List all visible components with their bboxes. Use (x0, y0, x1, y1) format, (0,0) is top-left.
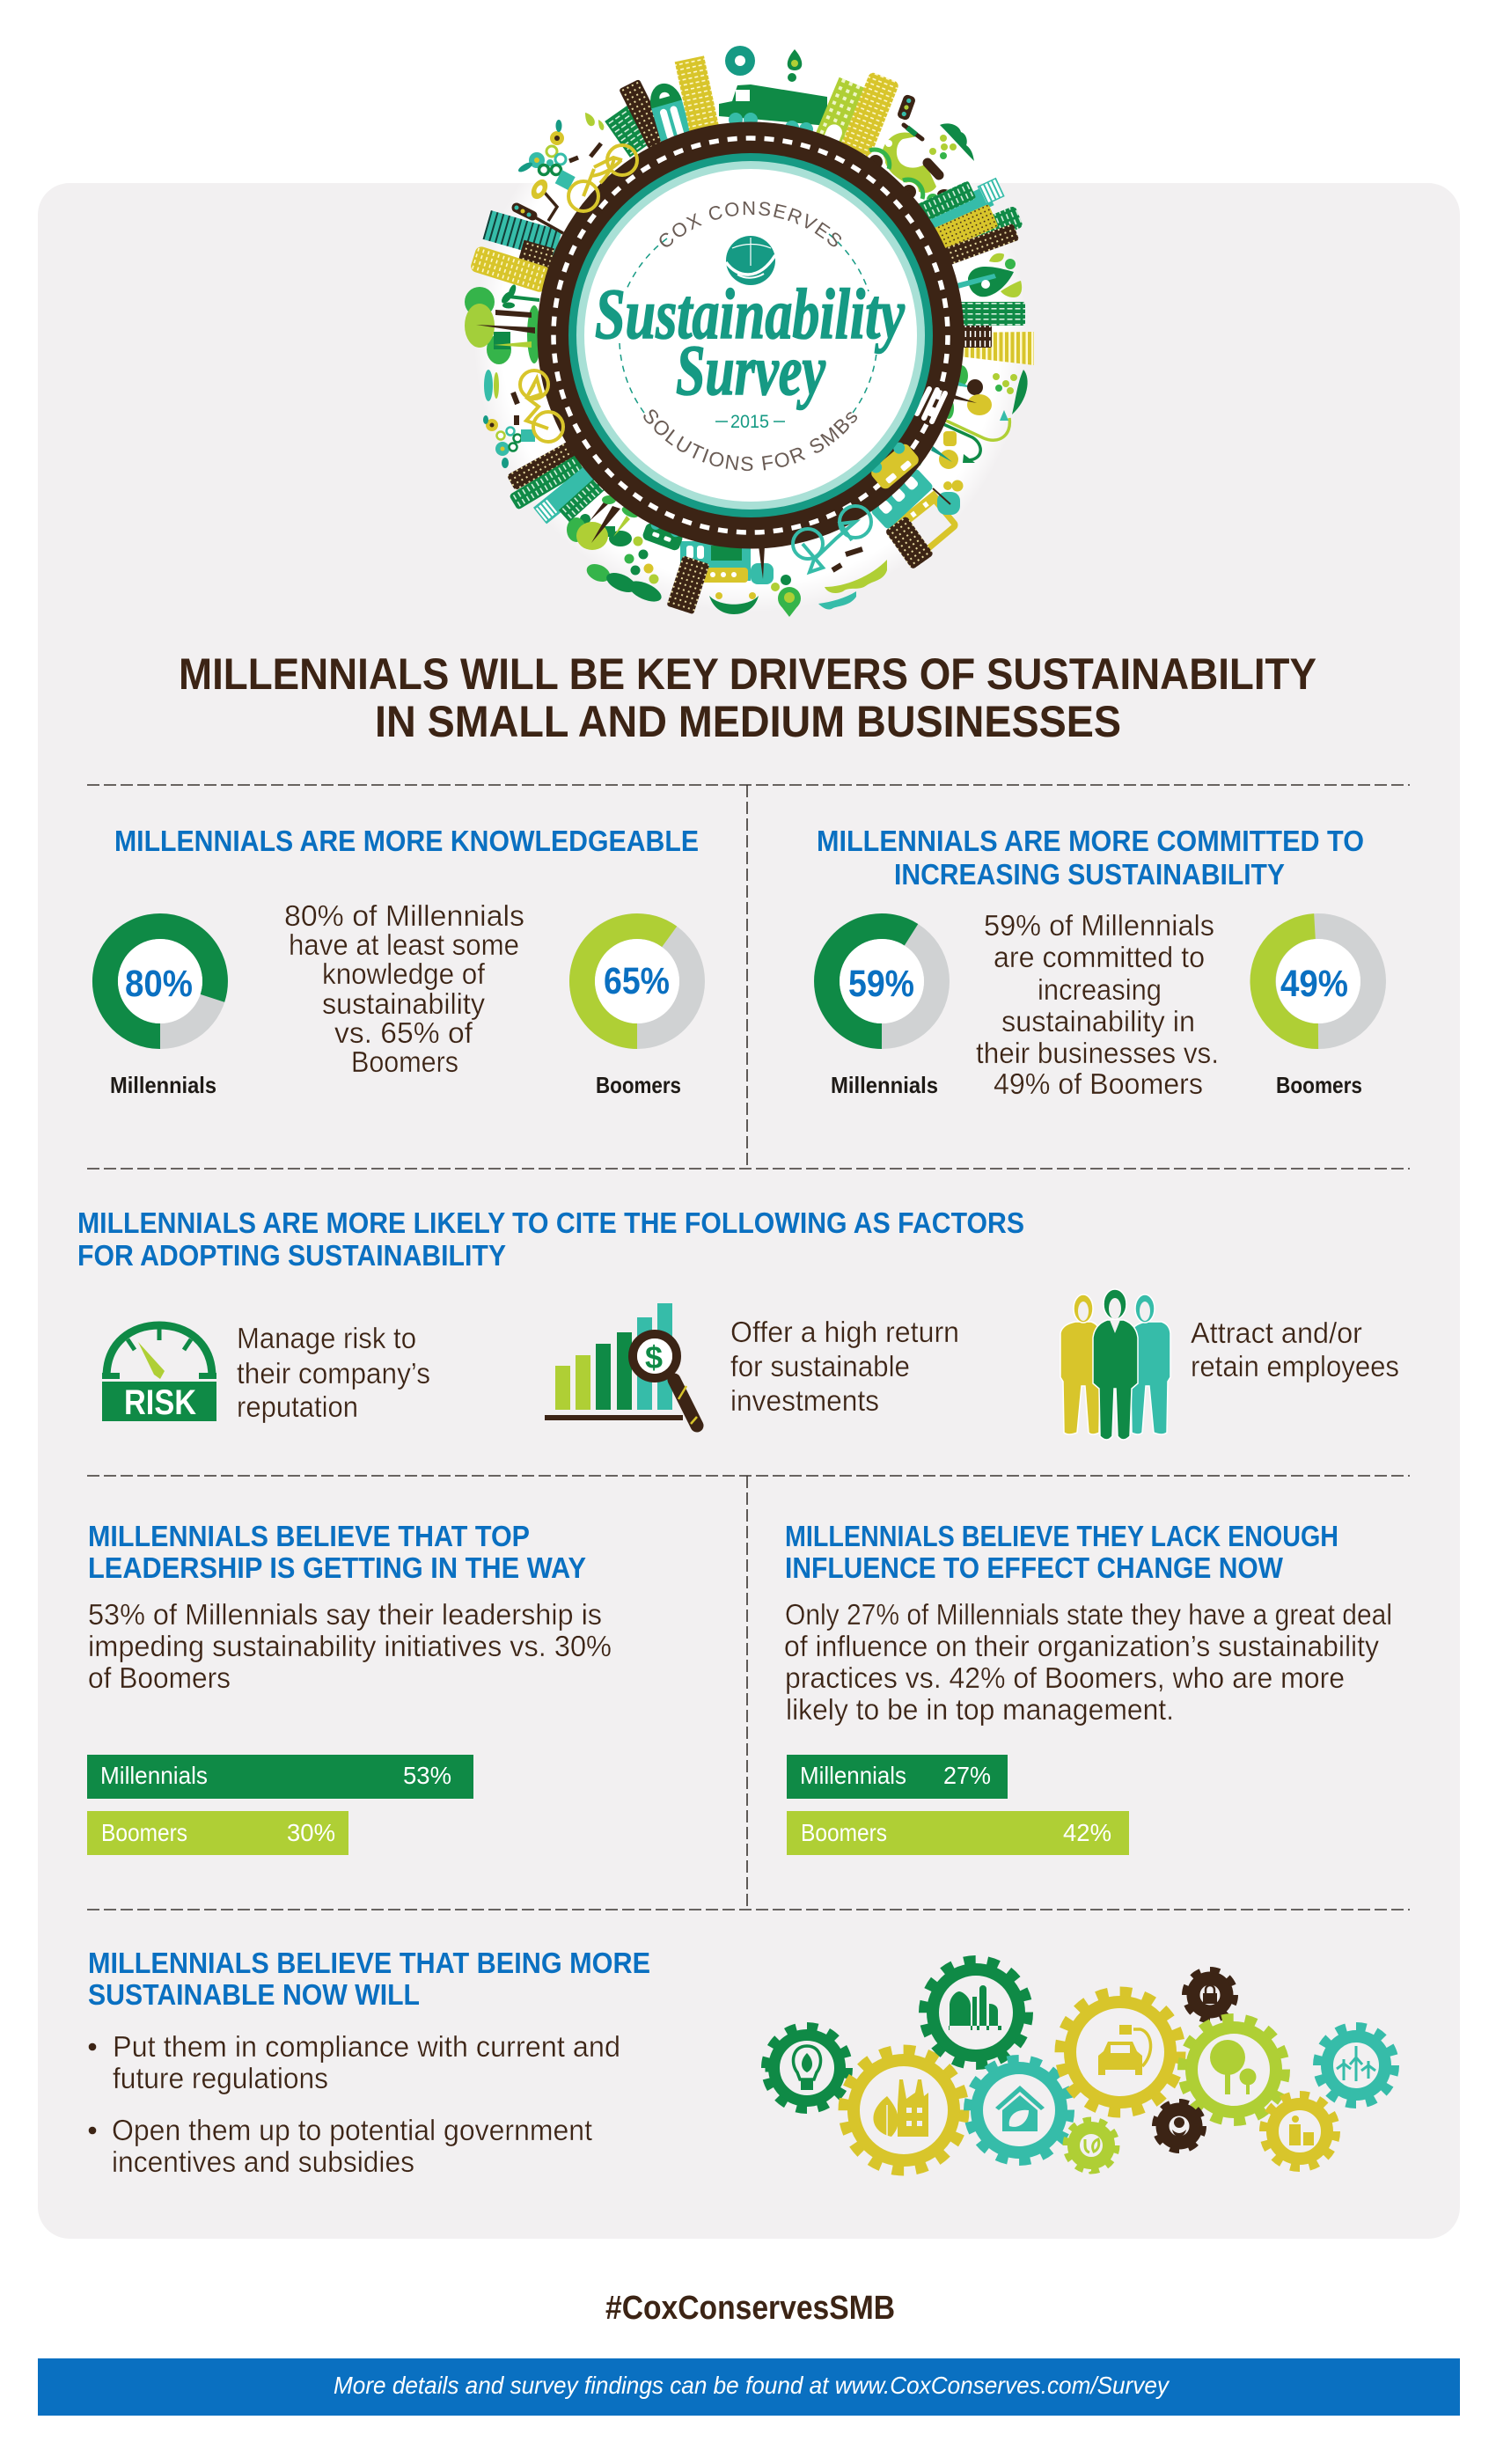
text: manage risk: their company’s (237, 1357, 430, 1390)
gear: electric car (1060, 1991, 1181, 2113)
gear: light bulb (766, 2026, 848, 2110)
text: 2015: 2015 (730, 412, 769, 432)
donut: millennials 80 percent: 80% (125, 963, 193, 1005)
text: solutions for smbs: SOLUTIONS FOR SMBs (643, 409, 857, 472)
footer bar: More details and survey findings can be found at www.CoxConserves.com/Survey (334, 2372, 1170, 2399)
text: manage risk: reputation (237, 1390, 358, 1423)
bullet list: Put them in compliance with current and (113, 2030, 620, 2063)
heading: sustainable now (88, 1947, 650, 2011)
text: influence description (784, 1598, 1392, 1726)
icon: bar chart with magnifier: $ (645, 1339, 663, 1375)
text: survey: Survey (676, 330, 825, 410)
icon: three employees (1060, 1289, 1170, 1440)
icon: green car bottom (642, 517, 686, 552)
heading: adoption factors: FOR ADOPTING SUSTAINABILITY (77, 1239, 506, 1272)
badge centre (584, 169, 917, 502)
gear: recycling person (1264, 2094, 1336, 2168)
icon: teal bicycle bottom (793, 506, 871, 572)
icon: risk gauge (102, 1325, 216, 1422)
gear: wind turbines (1317, 2027, 1395, 2104)
icon: sprout (500, 283, 539, 308)
donut: boomers 49 percent (1263, 926, 1373, 1098)
bullet list (88, 2030, 620, 2178)
icon: teal tree and shrubs (933, 480, 963, 515)
donut: millennials 59 percent: 59% (848, 963, 914, 1005)
gear: brown lock (1184, 1969, 1236, 2020)
icon: risk gauge: RISK (124, 1383, 196, 1422)
gear: trees (1182, 2018, 1286, 2122)
panel: committed (817, 825, 1373, 1100)
icon: cox leaf and hand (726, 236, 775, 285)
panel: being more sustainable (88, 1947, 1395, 2178)
icon: bottom car and pin (709, 575, 801, 617)
icon: leaf and stem (953, 253, 1022, 297)
icon: trees lower right (920, 431, 958, 469)
dashed circle (620, 234, 877, 416)
hashtag: #CoxConservesSMB (605, 2290, 895, 2327)
zebra crossing (917, 389, 945, 422)
road centre dashes (554, 138, 948, 532)
donut: boomers 65 percent: 65% (604, 960, 670, 1002)
icon: yellow bicycle upper left (568, 143, 637, 211)
bullet list: future regulations (113, 2062, 328, 2094)
icon: bar chart with magnifier (545, 1303, 697, 1426)
title (179, 649, 1316, 746)
donut: millennials 59 percent: Millennials (831, 1072, 938, 1098)
icon: flowers upper left (517, 120, 576, 190)
bar chart: leadership: 53% (403, 1762, 451, 1789)
donut: millennials 80 percent: Millennials (110, 1072, 216, 1098)
text: commitment description: their businesses vs. (976, 1037, 1219, 1069)
main panel (38, 183, 1460, 2239)
logo: sustainability survey badge (465, 46, 1034, 617)
bar chart: influence: Boomers (801, 1819, 887, 1846)
donut: millennials 59 percent (827, 926, 938, 1098)
icon: city ring left (465, 113, 605, 524)
heading: influence: MILLENNIALS BELIEVE THEY LACK ENOUGH (785, 1520, 1338, 1552)
icon: tree bottom left (567, 495, 640, 550)
text: knowledge description: have at least some (289, 928, 519, 961)
title: MILLENNIALS WILL BE KEY DRIVERS OF SUSTAINABILITY (179, 649, 1316, 699)
icon: city ring top (605, 55, 974, 202)
gear: eco house (968, 2059, 1070, 2161)
text: leadership description (88, 1598, 612, 1694)
text: high return: investments (730, 1384, 879, 1417)
icon: cloud top right (929, 123, 974, 161)
bullet list: Open them up to potential government (112, 2114, 592, 2146)
bullet list: incentives and subsidies (112, 2145, 414, 2178)
text: commitment description: 49% of Boomers (994, 1067, 1203, 1100)
text: influence description: likely to be in top management. (786, 1693, 1174, 1726)
text: knowledge description: Boomers (351, 1045, 458, 1078)
text: knowledge description: 80% of Millennials (284, 899, 524, 932)
text: manage risk (237, 1322, 430, 1423)
donut: boomers 65 percent (583, 926, 692, 1098)
text: commitment description: 59% of Millennials (984, 909, 1214, 942)
icon: yellow car on road (866, 438, 921, 491)
donut: boomers 49 percent: 49% (1280, 963, 1348, 1005)
heading: sustainable now: SUSTAINABLE NOW WILL (88, 1978, 420, 2011)
heading: influence (785, 1520, 1338, 1584)
pale teal inner ring (576, 161, 925, 510)
text: manage risk: Manage risk to (237, 1322, 416, 1354)
bar chart: influence (787, 1755, 1129, 1855)
bar chart: leadership: Boomers (101, 1819, 187, 1846)
text: leadership description: 53% of Millennials say their leadership is (88, 1598, 602, 1631)
bar chart: leadership: Millennials (100, 1762, 208, 1789)
text: knowledge description: vs. 65% of (334, 1016, 473, 1049)
gear: brown sprout (1155, 2101, 1204, 2151)
icon: flowers lower left (483, 415, 535, 468)
bar chart: influence: 27% (943, 1762, 991, 1789)
text: commitment description: sustainability in (1001, 1005, 1195, 1038)
donut: boomers 49 percent: Boomers (1276, 1072, 1362, 1098)
icon: city ring bottom (567, 495, 887, 617)
gear: small plug (1066, 2120, 1117, 2171)
panel: knowledgeable (105, 825, 699, 1098)
text: leadership description: of Boomers (88, 1661, 231, 1694)
footer bar (38, 2358, 1460, 2416)
text: influence description: practices vs. 42% of Boomers, who are more (785, 1661, 1345, 1694)
heading: adoption factors (77, 1206, 1024, 1272)
text: high return (730, 1316, 959, 1417)
text: sustainability: Sustainability (595, 274, 905, 354)
text: attract employees: Attract and/or (1191, 1316, 1362, 1349)
icon: recycling arrows (943, 410, 1009, 463)
text: leadership description: impeding sustainability initiatives vs. 30% (88, 1630, 612, 1662)
heading: influence: INFLUENCE TO EFFECT CHANGE NOW (785, 1551, 1284, 1584)
text: knowledge description (284, 899, 524, 1078)
icon: tree and leaf right (943, 365, 1028, 419)
gear: refinery (923, 1960, 1029, 2065)
icon: lime car top view (866, 125, 939, 202)
text: commitment description: increasing (1038, 973, 1162, 1006)
panel: lack of influence (784, 1520, 1392, 1855)
heading: more committed: MILLENNIALS ARE MORE COMMITTED TO (817, 825, 1364, 857)
panel: leadership in the way (87, 1520, 612, 1855)
panel: adoption factors (77, 1206, 1399, 1440)
text: attract employees (1191, 1316, 1399, 1382)
text: influence description: of influence on their organization’s sustainability (784, 1630, 1379, 1662)
text: high return: for sustainable (730, 1350, 910, 1382)
heading: leadership: LEADERSHIP IS GETTING IN THE WAY (88, 1551, 586, 1584)
icon: top flower and pin (725, 46, 802, 82)
text: commitment description (976, 909, 1219, 1100)
text: attract employees: retain employees (1191, 1350, 1399, 1382)
icon: city ring right (869, 179, 1034, 569)
heading: leadership (88, 1520, 586, 1584)
icon: yellow bicycle lower left (513, 370, 563, 442)
text: cox conserves: COX CONSERVES (660, 201, 841, 246)
text: knowledge description: sustainability (322, 987, 485, 1020)
text: high return: Offer a high return (730, 1316, 959, 1348)
title: IN SMALL AND MEDIUM BUSINESSES (375, 697, 1121, 746)
teal inner ring (568, 153, 933, 517)
gear: factory with leaf (843, 2050, 964, 2171)
heading: adoption factors: MILLENNIALS ARE MORE LIKELY TO CITE THE FOLLOWING AS FACTORS (77, 1206, 1024, 1239)
icon group: gears (766, 1960, 1395, 2171)
bar chart: influence: Millennials (800, 1762, 906, 1789)
heading: more committed: INCREASING SUSTAINABILITY (894, 858, 1285, 891)
text: commitment description: are committed to (994, 941, 1205, 973)
text: knowledge description: knowledge of (322, 957, 486, 990)
icon: tree left (465, 287, 541, 364)
heading: sustainable now: MILLENNIALS BELIEVE THAT BEING MORE (88, 1947, 650, 1979)
heading: more committed (817, 825, 1364, 891)
heading: more knowledgeable: MILLENNIALS ARE MORE KNOWLEDGEABLE (114, 825, 699, 857)
text: 2015 (715, 412, 785, 432)
bar chart: leadership (87, 1755, 473, 1855)
icon: traffic light (514, 177, 563, 233)
heading: leadership: MILLENNIALS BELIEVE THAT TOP (88, 1520, 530, 1552)
donut: boomers 65 percent: Boomers (596, 1072, 681, 1098)
road ring (554, 138, 948, 532)
donut: millennials 80 percent (105, 926, 216, 1098)
bar chart: leadership: 30% (287, 1819, 335, 1846)
icon: cloud bottom left (584, 561, 664, 605)
text: influence description: Only 27% of Millennials state they have a great deal (785, 1598, 1392, 1631)
bar chart: influence: 42% (1063, 1819, 1111, 1846)
